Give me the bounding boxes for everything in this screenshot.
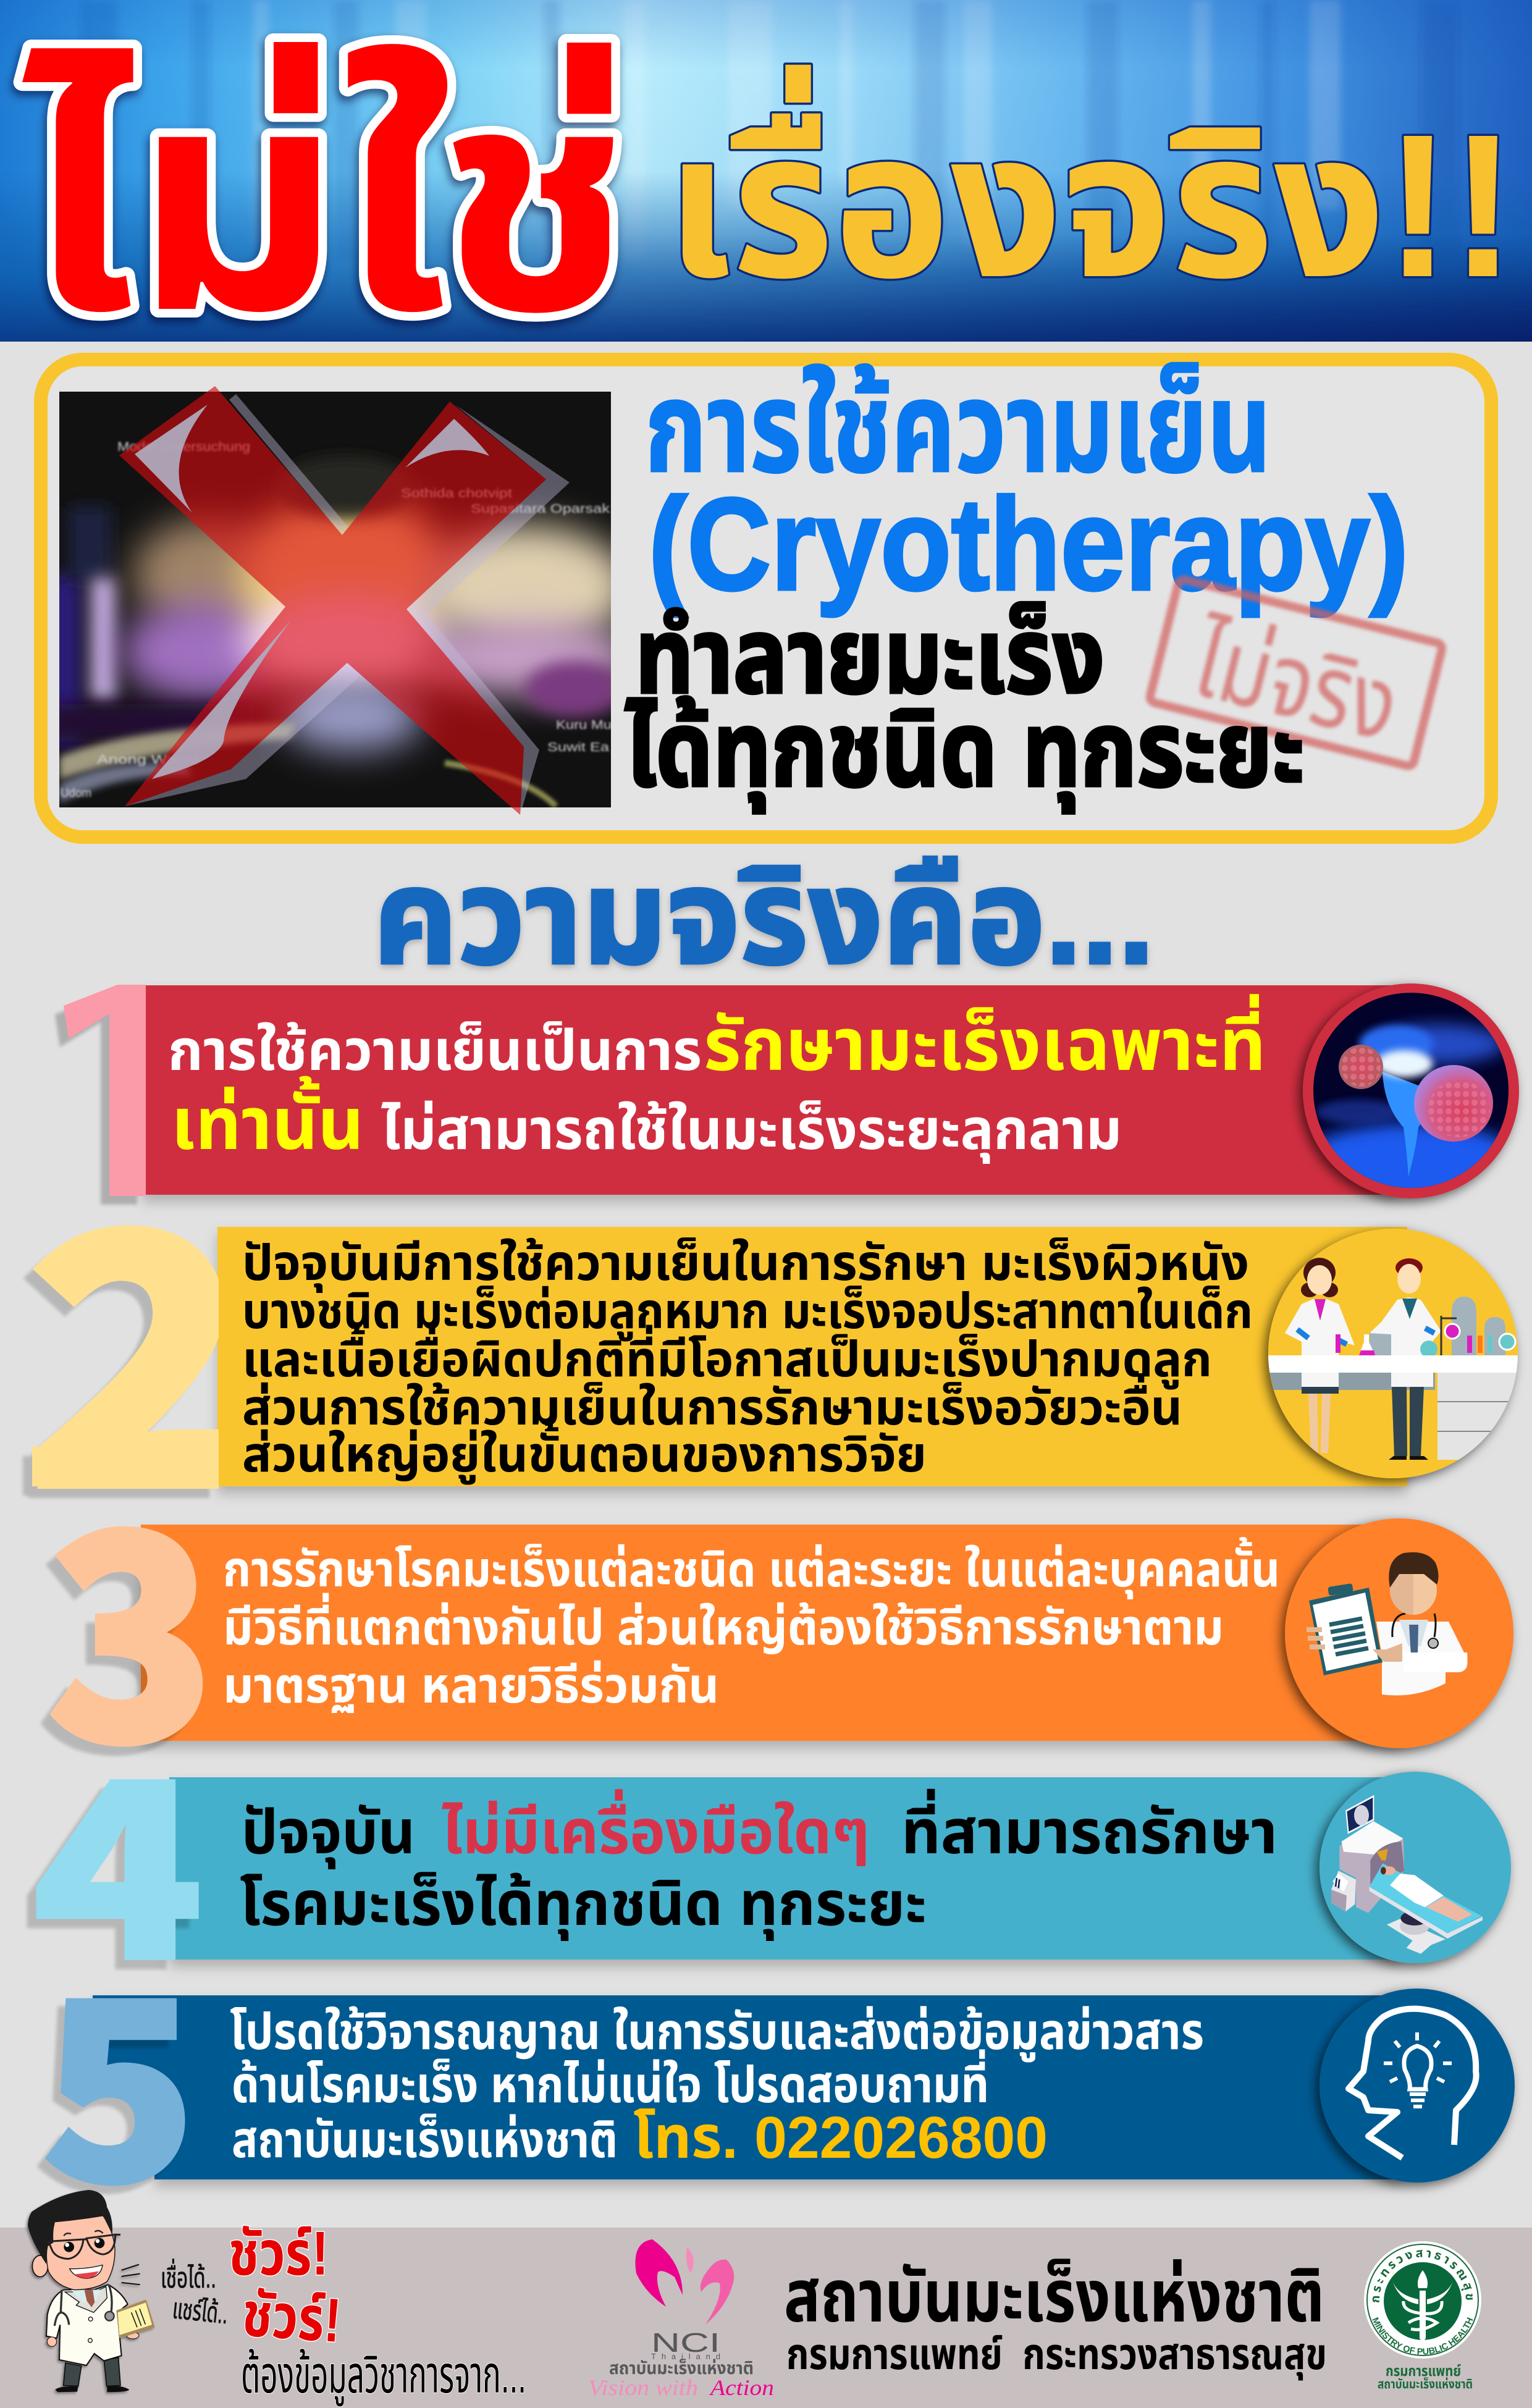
woman — [1285, 1258, 1355, 1453]
fact 5 text: สถาบันมะเร็งแห่งชาติ — [232, 2112, 618, 2168]
panel: fact 4 — [23, 1675, 1511, 2038]
fact 4 text — [240, 1789, 1277, 1941]
blurred photo with red cross: Kuru Mu — [556, 718, 612, 732]
blurred photo with red cross: Anong Wanid — [97, 753, 199, 767]
icon: scientists — [1268, 1229, 1518, 1478]
logo: ministry of public health: กระทรวงสาธารณสุข — [1373, 2250, 1473, 2302]
slogan: ชัวร์! — [229, 2219, 329, 2288]
numeral 5: 5 — [34, 1902, 188, 2260]
icon: head with lightbulb — [1319, 1989, 1515, 2183]
logo: NCI: สถาบันมะเร็งแห่งชาติ — [609, 2359, 754, 2378]
fact 4 text: ปัจจุบัน — [242, 1798, 415, 1869]
slogan: แชร์ได้.. — [171, 2292, 230, 2330]
fact 2 text: ส่วนการใช้ความเย็นในการรักษามะเร็งอวัยวะอื่น — [242, 1373, 1182, 1435]
logo: ministry of public health: MINISTRY OF PUBLIC HEALTH — [1372, 2317, 1473, 2355]
fact 3 text: การรักษาโรคมะเร็งแต่ละชนิด แต่ละระยะ ในแต่ละบุคคลนั้น — [223, 1537, 1280, 1599]
icon: cryo tumour — [1294, 983, 1529, 1212]
fact 5 text: ด้านโรคมะเร็ง หากไม่แน่ใจ โปรดสอบถามที่ — [232, 2049, 989, 2113]
numeral 1: 1 — [43, 862, 204, 1279]
panel: cryotherapy claim — [41, 357, 1491, 837]
lab glassware — [1359, 1316, 1515, 1358]
blurred photo with red cross: Sothida chotvipt — [401, 487, 513, 500]
slogan: ต้องข้อมูลวิชาการจาก... — [241, 2346, 526, 2406]
fact 1 text: รักษามะเร็งเฉพาะที่ — [704, 994, 1266, 1086]
blurred photo with red cross: Model Untersuchung — [117, 440, 250, 454]
blurred photo with red cross: Supasitara Oparsak — [471, 502, 610, 516]
claim line 2: ได้ทุกชนิด ทุกระยะ — [625, 691, 1305, 814]
logo: NCI: Thailand — [651, 2352, 720, 2361]
slogan — [161, 2219, 526, 2406]
fact 3 text: มีวิธีที่แตกต่างกันไป ส่วนใหญ่ต้องใช้วิธีการรักษาตาม — [223, 1593, 1224, 1655]
heading: cryotherapy thai: การใช้ความเย็น — [645, 357, 1271, 499]
numeral 4: 4 — [23, 1685, 195, 2038]
panel: fact 3 — [38, 1410, 1513, 1831]
red cross — [119, 386, 570, 815]
fact 2 text: บางชนิด มะเร็งต่อมลูกหมาก มะเร็งจอประสาทตาในเด็ก — [242, 1284, 1253, 1341]
doctor mascot — [28, 2190, 155, 2392]
fact 5 text: โทร. 022026800 — [633, 2105, 1048, 2171]
institute name: สถาบันมะเร็งแห่งชาติ — [784, 2256, 1324, 2338]
panel: fact 5 — [34, 1894, 1515, 2260]
department name: กรมการแพทย์ กระทรวงสาธารณสุข — [786, 2330, 1327, 2380]
icon: doctor with clipboard — [1285, 1518, 1513, 1748]
logo: NCI: NCI — [651, 2328, 720, 2358]
numeral 3: 3 — [47, 1410, 215, 1822]
fact 4 text: ไม่มีเครื่องมือใดๆ — [442, 1789, 870, 1867]
numeral 2: 2 — [26, 1084, 251, 1585]
slogan: ชัวร์! — [240, 2280, 343, 2355]
numeral 2: 2 — [17, 1093, 242, 1594]
panel: fact 1 — [43, 862, 1529, 1279]
blurred photo with red cross: Suwit Ea — [547, 741, 610, 754]
fact 1 text: การใช้ความเย็นเป็นการ — [168, 1019, 702, 1082]
header banner — [0, 0, 1532, 376]
fact 4 text: โรคมะเร็งได้ทุกชนิด ทุกระยะ — [240, 1869, 927, 1941]
logo: ministry of public health: สถาบันมะเร็งแห่งชาติ — [1378, 2377, 1473, 2391]
blurred photo with red cross: Udom — [61, 786, 91, 800]
panel: fact 2 — [17, 1084, 1518, 1594]
logo: NCI: Action — [709, 2375, 774, 2400]
man — [1370, 1258, 1441, 1460]
logo: NCI: Vision with — [588, 2375, 698, 2400]
blurred photo with red cross — [43, 386, 636, 815]
fact 2 text: ปัจจุบันมีการใช้ความเย็นในการรักษา มะเร็งผิวหนัง — [242, 1236, 1249, 1293]
logo: NCI — [588, 2239, 774, 2400]
numeral 1 — [54, 985, 146, 1206]
slogan: เชื่อได้.. — [161, 2259, 216, 2294]
fact 5 text — [230, 2004, 1204, 2171]
claim line 1: ทำลายมะเร็ง — [635, 598, 1105, 715]
heading: the truth is: ความจริงคือ... — [373, 843, 1155, 991]
numeral 4: 4 — [32, 1675, 204, 2029]
fact 3 text — [223, 1537, 1280, 1713]
heading: cryotherapy latin: (Cryotherapy) — [649, 471, 1408, 617]
icon: scanner — [1319, 1772, 1511, 1963]
fact 5 text: โปรดใช้วิจารณญาณ ในการรับและส่งต่อข้อมูลข่าวสาร — [230, 2004, 1204, 2063]
title: true story: เรื่องจริง!! — [666, 63, 1516, 319]
numeral 3: 3 — [38, 1420, 206, 1831]
title: not: ไม่ใช่ — [22, 25, 631, 376]
fact 1 text: ไม่สามารถใช้ในมะเร็งระยะลุกลาม — [381, 1098, 1122, 1164]
logo: ministry of public health — [1364, 2241, 1481, 2391]
fact 4 text: ที่สามารถรักษา — [901, 1789, 1277, 1867]
fact 3 text: มาตรฐาน หลายวิธีร่วมกัน — [223, 1658, 719, 1713]
footer band — [0, 2190, 1532, 2408]
fact 1 text — [168, 994, 1266, 1165]
fact 2 text — [242, 1236, 1253, 1484]
fact 2 text: ส่วนใหญ่อยู่ในขั้นตอนของการวิจัย — [242, 1422, 927, 1484]
stamp: not true: ไม่จริง — [1182, 603, 1409, 763]
numeral 5: 5 — [42, 1894, 196, 2252]
fact 2 text: และเนื้อเยื่อผิดปกติที่มีโอกาสเป็นมะเร็งปากมดลูก — [242, 1325, 1212, 1389]
logo: ministry of public health: กรมการแพทย์ — [1386, 2363, 1461, 2380]
fact 1 text: เท่านั้น — [171, 1076, 364, 1165]
